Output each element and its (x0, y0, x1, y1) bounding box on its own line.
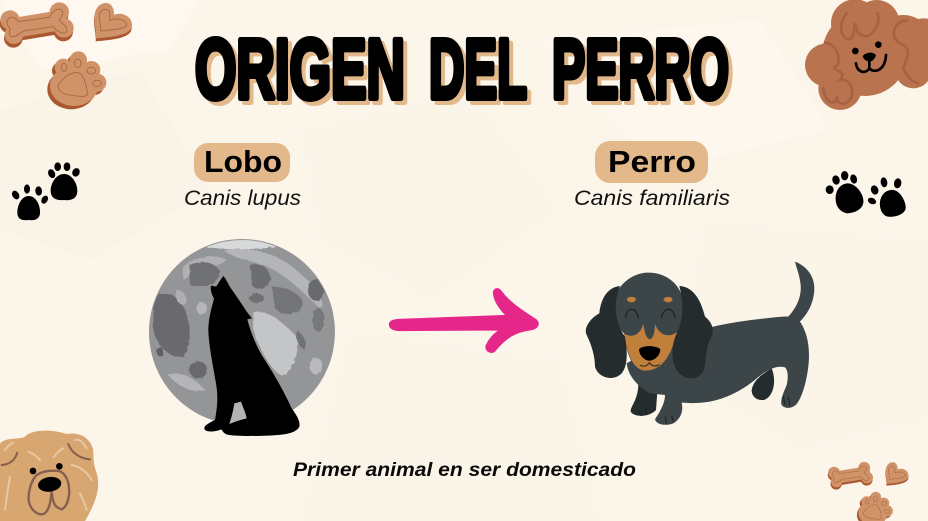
caption: Canis familiaris: Canis familiaris (574, 187, 731, 210)
dog tail (787, 262, 814, 323)
arrow (389, 289, 538, 352)
title: ORIGEN (195, 22, 405, 116)
title: DEL (429, 22, 527, 116)
dog nose and mouth (639, 346, 660, 361)
icon: cookie heart bottom right (885, 462, 909, 486)
footer caption: Primer animal en ser domesticado (293, 460, 636, 481)
dog far legs (631, 368, 774, 416)
dog ears (586, 286, 713, 378)
dog toes (638, 397, 790, 423)
moon with howling wolf (149, 239, 335, 436)
dog body (627, 317, 809, 425)
dog eyebrows (627, 297, 673, 302)
dog tan muzzle (624, 324, 677, 371)
icon: cookie paw top left (47, 51, 106, 109)
label: Perro (595, 141, 708, 183)
label: Lobo: Lobo (204, 144, 282, 179)
dog head (612, 273, 684, 371)
moon (149, 239, 335, 425)
label: Perro: Perro (608, 144, 696, 179)
title: PERRO (552, 22, 729, 116)
icon: cookie bone bottom right (828, 462, 873, 490)
icon: black paw prints right (826, 171, 906, 217)
dog eyes (626, 309, 675, 318)
icon: black paw prints left (10, 162, 81, 220)
icon: chow dog head bottom left (0, 431, 98, 521)
title (195, 22, 729, 116)
wolf silhouette (204, 276, 300, 436)
caption: Canis lupus: Canis lupus (184, 187, 302, 210)
icon: cookie paw bottom right (857, 492, 893, 521)
icon: cookie bone top left (0, 2, 74, 48)
dachshund illustration (586, 262, 814, 425)
icon: poodle head top right (805, 0, 928, 110)
wolf leg gap (229, 402, 247, 424)
icon: cookie heart top left (94, 3, 132, 41)
